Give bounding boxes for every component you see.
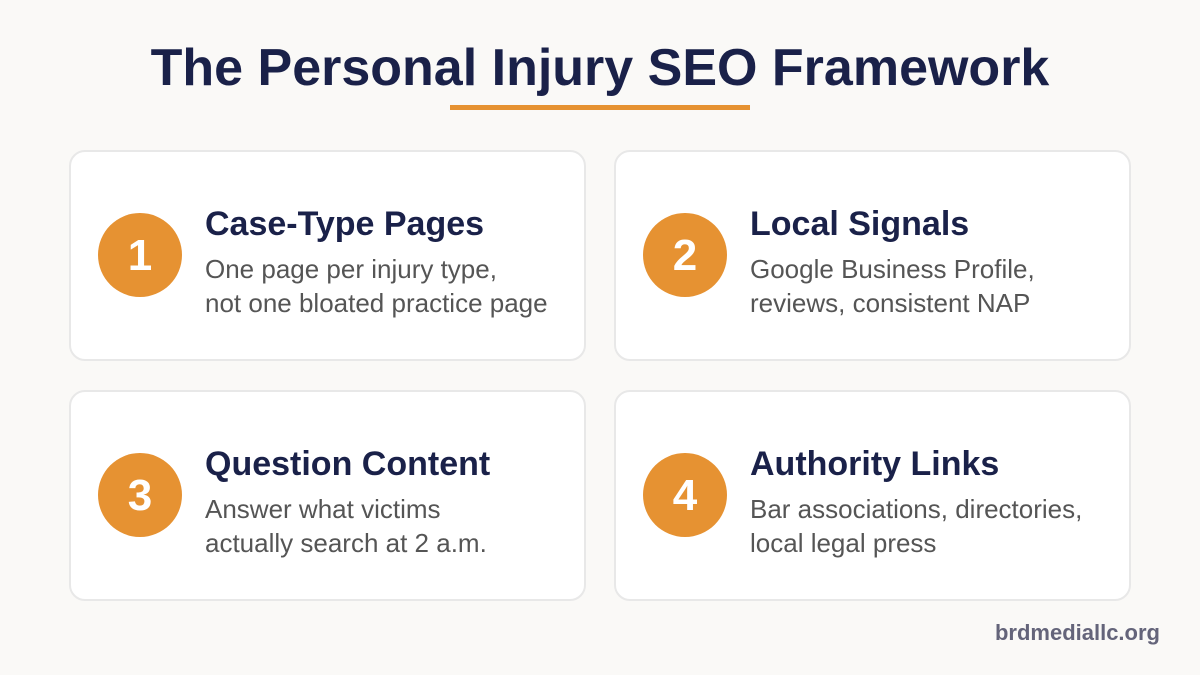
text: case-type pages description (205, 254, 548, 318)
text: local signals description: Google Business Profile, (750, 254, 1035, 284)
text: authority links description: Bar associations, directories, (750, 494, 1082, 524)
text: local signals description (750, 254, 1035, 318)
title underline (450, 105, 750, 110)
icon: number 4 badge: 4 (673, 471, 697, 520)
panel: authority links (614, 390, 1131, 601)
heading: local signals: Local Signals (750, 205, 969, 243)
heading: question content: Question Content (205, 445, 490, 483)
title: The Personal Injury SEO Framework (151, 39, 1049, 97)
panel: case-type pages (69, 150, 586, 361)
icon: number 4 badge (643, 453, 727, 537)
icon: number 2 badge (643, 213, 727, 297)
text: question content description: actually search at 2 a.m. (205, 528, 487, 558)
icon: number 1 badge: 1 (128, 231, 152, 280)
icon: number 3 badge: 3 (128, 471, 152, 520)
text: case-type pages description: not one bloated practice page (205, 288, 548, 318)
icon: number 1 badge (98, 213, 182, 297)
panel: local signals (614, 150, 1131, 361)
text: authority links description (750, 494, 1082, 558)
heading: case-type pages: Case-Type Pages (205, 205, 484, 243)
heading: authority links: Authority Links (750, 445, 999, 483)
panel: question content (69, 390, 586, 601)
text: authority links description: local legal press (750, 528, 936, 558)
icon: number 3 badge (98, 453, 182, 537)
text: local signals description: reviews, consistent NAP (750, 288, 1030, 318)
footer: site credit: brdmediallc.org (995, 620, 1160, 645)
text: case-type pages description: One page per injury type, (205, 254, 497, 284)
icon: number 2 badge: 2 (673, 231, 697, 280)
text: question content description (205, 494, 487, 558)
text: question content description: Answer what victims (205, 494, 440, 524)
